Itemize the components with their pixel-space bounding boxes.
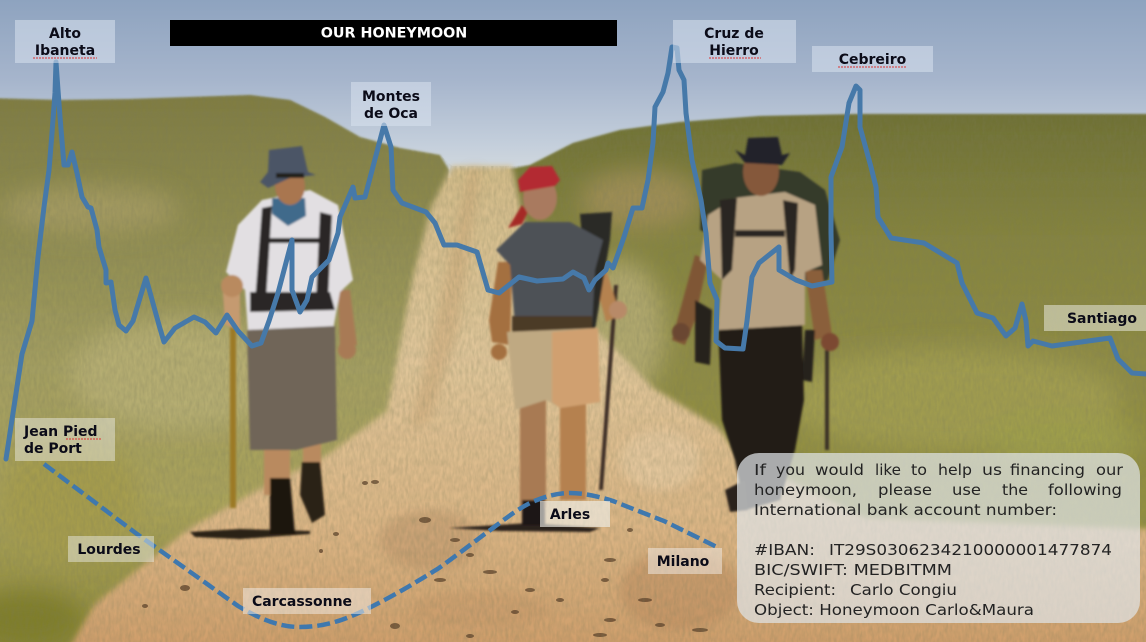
label: Lourdes: Lourdes bbox=[77, 542, 141, 558]
callout: bank details bbox=[737, 453, 1140, 623]
callout: bank details: use bbox=[952, 481, 981, 499]
callout: bank details: the bbox=[1002, 481, 1028, 499]
callout: bank details: like bbox=[875, 461, 901, 479]
callout: bank details: would bbox=[815, 461, 864, 479]
label: Jean Pied de Port: de Port bbox=[24, 441, 82, 457]
face bbox=[275, 167, 305, 205]
face bbox=[523, 176, 557, 220]
callout: bank details: Carlo Congiu bbox=[850, 581, 957, 599]
harness bbox=[250, 206, 335, 312]
callout: bank details: If bbox=[754, 461, 767, 479]
callout: bank details: you bbox=[776, 461, 805, 479]
label: Lourdes bbox=[68, 536, 154, 562]
neck scarf bbox=[272, 198, 306, 226]
hand bbox=[609, 301, 627, 319]
label: Santiago: Santiago bbox=[1067, 311, 1137, 327]
sky bbox=[0, 0, 1146, 178]
walking stick bbox=[230, 300, 236, 508]
hat bbox=[260, 146, 316, 188]
label: Arles bbox=[540, 501, 610, 527]
label: Alto Ibaneta bbox=[15, 20, 115, 63]
label: Alto Ibaneta: Alto bbox=[49, 26, 81, 42]
legs bbox=[264, 445, 290, 495]
label: Cruz de Hierro: Cruz de bbox=[704, 26, 764, 42]
callout: bank details: help bbox=[938, 461, 972, 479]
shorts bbox=[247, 326, 337, 450]
hiker left bbox=[190, 146, 357, 539]
elevation profile line bbox=[6, 47, 1146, 459]
trousers bbox=[718, 322, 804, 510]
callout: bank details: International bank account number: bbox=[754, 501, 1057, 519]
label: Santiago bbox=[1044, 305, 1146, 331]
road ruts and gravel bbox=[380, 168, 740, 630]
label: Carcassonne bbox=[243, 588, 371, 614]
right hill bbox=[505, 114, 1146, 540]
shirt bbox=[226, 190, 353, 332]
shadow bbox=[190, 529, 310, 539]
callout: bank details: Object: Honeymoon Carlo&Maura bbox=[754, 601, 1034, 619]
label: Carcassonne: Carcassonne bbox=[252, 594, 352, 610]
hat bbox=[735, 137, 790, 165]
shirt bbox=[700, 192, 822, 330]
hiker centre bbox=[448, 166, 627, 532]
label: Cruz de Hierro: Hierro bbox=[709, 43, 759, 59]
callout: bank details: us bbox=[982, 461, 1002, 479]
hand bbox=[221, 275, 243, 297]
title bar: OUR HONEYMOON bbox=[321, 26, 467, 42]
callout: bank details: #IBAN: bbox=[754, 541, 815, 559]
label: Montes de Oca bbox=[351, 82, 431, 126]
label: Milano bbox=[648, 548, 722, 574]
label: Montes de Oca: Montes bbox=[362, 89, 420, 105]
hand bbox=[821, 333, 839, 351]
callout: bank details: please bbox=[878, 481, 932, 499]
trekking pole bbox=[825, 350, 829, 450]
trekking pole bbox=[599, 285, 618, 490]
boot bbox=[522, 500, 545, 525]
callout: bank details: IT29S0306234210000001477874 bbox=[829, 541, 1112, 559]
straps hanging bbox=[695, 300, 815, 382]
callout: bank details: BIC/SWIFT: MEDBITMM bbox=[754, 561, 952, 579]
label: Montes de Oca: de Oca bbox=[364, 106, 418, 122]
face bbox=[743, 148, 779, 196]
label: Cruz de Hierro bbox=[673, 20, 796, 63]
label: Milano: Milano bbox=[657, 554, 710, 570]
shadow bbox=[448, 523, 600, 532]
left hill bbox=[0, 95, 449, 642]
harness bbox=[720, 198, 798, 280]
label: Jean Pied de Port: Jean Pied bbox=[23, 424, 98, 440]
arms bbox=[222, 275, 240, 330]
grass blotches bbox=[0, 170, 1140, 642]
callout: bank details: our bbox=[1096, 461, 1124, 479]
callout: bank details: financing bbox=[1010, 461, 1085, 479]
label: Cebreiro bbox=[812, 46, 933, 72]
boots bbox=[270, 478, 295, 534]
label: Alto Ibaneta: Ibaneta bbox=[35, 43, 95, 59]
bandana tail bbox=[508, 205, 528, 228]
label: Arles: Arles bbox=[550, 507, 590, 523]
callout: bank details: honeymoon, bbox=[754, 481, 857, 499]
vest bbox=[496, 222, 603, 325]
backpack bbox=[700, 163, 840, 285]
shorts bbox=[507, 328, 600, 410]
dashed route line bbox=[44, 464, 719, 627]
label: Jean Pied de Port bbox=[15, 418, 115, 461]
gravel specks bbox=[142, 480, 708, 638]
backpack bbox=[580, 212, 612, 335]
callout: bank details: Recipient: bbox=[754, 581, 836, 599]
arms bbox=[672, 255, 708, 345]
hiker right bbox=[672, 137, 840, 512]
title bar bbox=[170, 20, 617, 46]
callout: bank details: to bbox=[911, 461, 927, 479]
callout: bank details: following bbox=[1048, 481, 1122, 499]
belt bbox=[512, 316, 592, 333]
dirt road bbox=[60, 166, 1146, 642]
legs bbox=[520, 398, 546, 508]
arms bbox=[489, 262, 512, 345]
boot bbox=[725, 480, 748, 512]
bandana bbox=[518, 166, 560, 192]
label: Cebreiro: Cebreiro bbox=[839, 52, 907, 68]
